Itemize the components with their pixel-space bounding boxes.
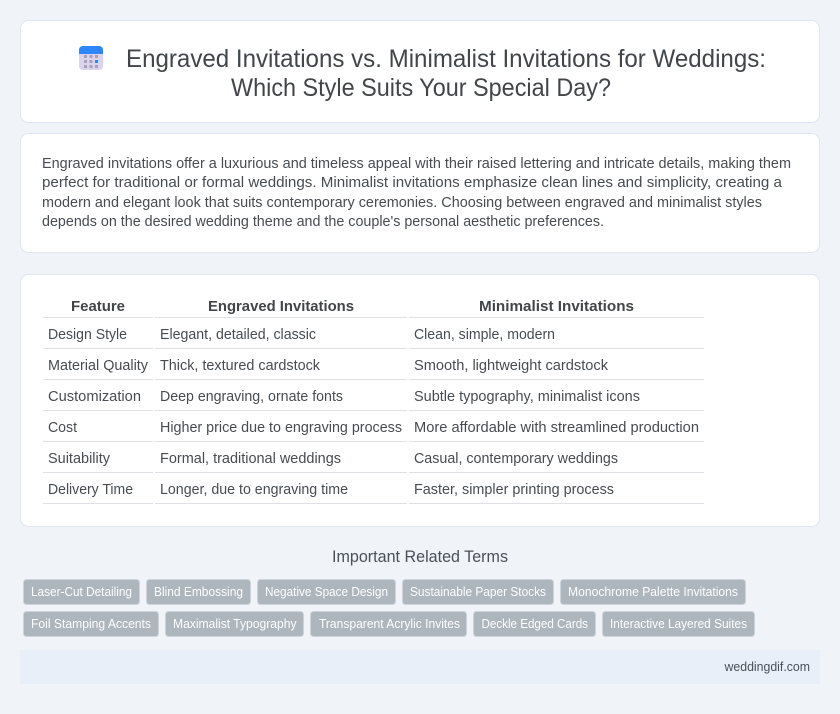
table row: cost: Cost: [48, 420, 77, 436]
tags: related terms: [24, 580, 754, 636]
footer: weddingdif.com: [724, 659, 810, 674]
table row: material quality: Thick, textured cardstock: [160, 358, 321, 374]
intro paragraph: depends on the desired wedding theme and the couple's personal aesthetic preferences.: [42, 214, 604, 230]
table row: delivery time: Delivery Time: [48, 482, 133, 498]
tag: [146, 580, 250, 604]
table header: Minimalist Invitations: [479, 298, 634, 315]
table row: suitability: Casual, contemporary weddings: [414, 451, 618, 467]
tag: Blind Embossing: [154, 585, 243, 599]
intro paragraph: Engraved invitations offer a luxurious and timeless appeal with their raised lettering and intricate details, making them: [42, 156, 791, 172]
panel: intro text: [20, 134, 820, 252]
table row: design style: Design Style: [48, 327, 127, 343]
table row: customization: Deep engraving, ornate fonts: [160, 389, 343, 405]
title: Engraved Invitations vs. Minimalist Invitations for Weddings:: [126, 45, 766, 73]
tag: [24, 612, 158, 636]
table header: Feature: [71, 298, 125, 315]
table header: [71, 298, 634, 315]
table row: material quality: [48, 358, 609, 374]
table row: delivery time: [48, 482, 614, 498]
table row: material quality: Material Quality: [48, 358, 149, 374]
tag: [166, 612, 304, 636]
table row: customization: Subtle typography, minimalist icons: [414, 389, 640, 405]
tag: [474, 612, 596, 636]
tag: Transparent Acrylic Invites: [319, 617, 460, 631]
intro paragraph: [42, 156, 791, 230]
panel: comparison table: [20, 274, 820, 526]
table row: customization: Customization: [48, 389, 141, 405]
title: [126, 45, 766, 102]
icon: calendar: [79, 46, 103, 70]
table row: cost: [48, 420, 699, 436]
tag: Monochrome Palette Invitations: [568, 585, 738, 599]
tag: Maximalist Typography: [173, 617, 297, 631]
intro paragraph: perfect for traditional or formal weddings. Minimalist invitations emphasize clean lines and simplicity, creating a: [42, 175, 783, 191]
tag: [602, 612, 754, 636]
table row: design style: [48, 327, 555, 343]
tag: Deckle Edged Cards: [482, 617, 588, 631]
intro paragraph: modern and elegant look that suits contemporary ceremonies. Choosing between engraved and minimalist styles: [42, 195, 762, 211]
table row: design style: Elegant, detailed, classic: [160, 327, 316, 343]
tag: [402, 580, 554, 604]
table row: material quality: Smooth, lightweight cardstock: [414, 358, 609, 374]
tag: [310, 612, 466, 636]
table row: delivery time: Faster, simpler printing process: [414, 482, 614, 498]
table row: design style: Clean, simple, modern: [414, 327, 555, 343]
tag: Foil Stamping Accents: [31, 617, 151, 631]
table row: cost: Higher price due to engraving process: [160, 420, 402, 436]
table row: suitability: Suitability: [48, 451, 111, 467]
tag: Sustainable Paper Stocks: [410, 585, 546, 599]
tag: Negative Space Design: [265, 585, 388, 599]
title: Which Style Suits Your Special Day?: [231, 74, 611, 102]
tag: Interactive Layered Suites: [610, 617, 747, 631]
heading: important related terms: Important Related Terms: [332, 548, 508, 566]
tag: [24, 580, 140, 604]
tag: [258, 580, 396, 604]
table header: Engraved Invitations: [208, 298, 354, 315]
table row: suitability: [48, 451, 618, 467]
table row: suitability: Formal, traditional weddings: [160, 451, 341, 467]
tag: Laser-Cut Detailing: [31, 585, 132, 599]
table row: cost: More affordable with streamlined production: [414, 420, 699, 436]
tag: [560, 580, 746, 604]
footer: [20, 650, 820, 684]
panel: title header: [20, 20, 820, 122]
table row: customization: [48, 389, 640, 405]
table row: delivery time: Longer, due to engraving time: [160, 482, 348, 498]
